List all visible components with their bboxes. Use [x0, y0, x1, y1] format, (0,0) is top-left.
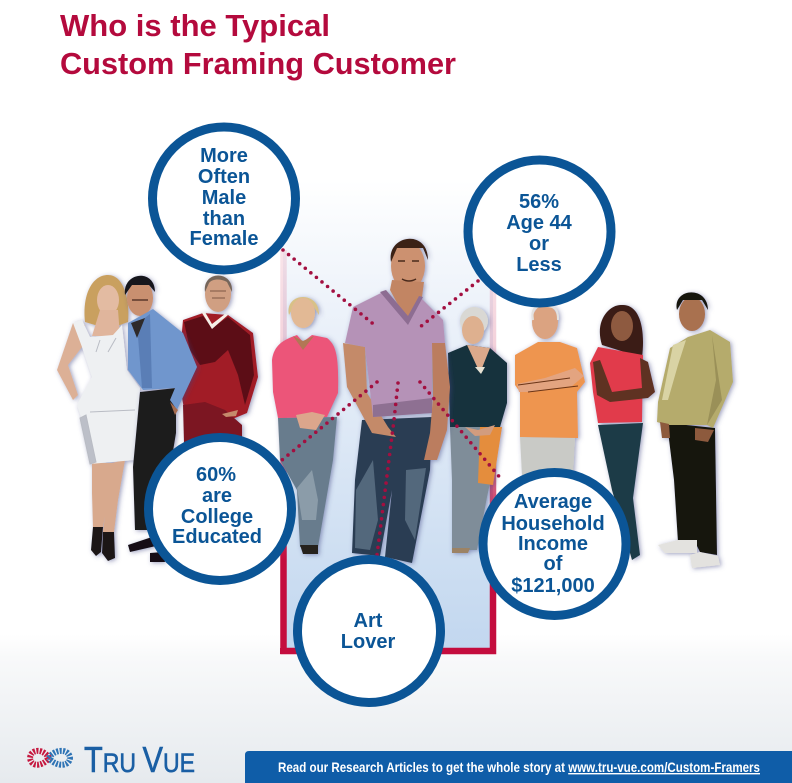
callout: 56% age 44 or less: Less	[516, 254, 562, 276]
person: central man in lilac t-shirt	[343, 239, 450, 563]
callout: 60% college educated: Educated	[172, 526, 262, 548]
callout: average household income: Household	[501, 513, 605, 535]
callout: more often male than female: Male	[202, 187, 246, 209]
callout: average household income: Average	[514, 491, 592, 513]
framed panel behind central figure	[280, 180, 496, 654]
title	[60, 9, 456, 81]
callout: average household income: $121,000	[511, 575, 595, 597]
callout: more often male than female: Often	[198, 166, 250, 188]
person: older woman in dark top	[448, 307, 507, 553]
callout: average household income: of	[544, 553, 563, 575]
person: woman in red top	[590, 305, 655, 560]
callout: 56% age 44 or less: Age 44	[506, 212, 573, 234]
person: older man in orange polo	[515, 305, 585, 475]
callout: art lover: Lover	[341, 631, 395, 653]
callout: 60% college educated: 60%	[196, 464, 236, 486]
person: young man in khaki sweater	[657, 292, 733, 568]
person: woman in pink sweater	[272, 297, 338, 554]
callout: 60% college educated: are	[202, 485, 232, 507]
callout: more often male than female	[152, 127, 296, 270]
callout: more often male than female: than	[203, 208, 245, 230]
callout: 60% college educated	[148, 438, 292, 580]
wordmark: TRU VUE	[84, 739, 195, 780]
callout: average household income: Income	[518, 533, 588, 555]
callout: 56% age 44 or less: 56%	[519, 191, 559, 213]
callout: 60% college educated: College	[181, 506, 253, 528]
callout: art lover	[298, 560, 440, 702]
callout: art lover: Art	[354, 610, 383, 632]
logo: Tru Vue	[30, 739, 195, 780]
dotted connector lines	[282, 250, 502, 555]
people group	[57, 239, 733, 568]
title: Custom Framing Customer	[60, 47, 456, 81]
person: man in red sweater	[178, 276, 258, 500]
title: Who is the Typical	[60, 9, 330, 43]
icon: infinity mark	[30, 751, 70, 765]
person: man in blue shirt	[125, 276, 197, 562]
footer banner	[245, 751, 792, 783]
callout: more often male than female: More	[200, 145, 248, 167]
callout: average household income	[483, 472, 626, 616]
footer banner: Read our Research Articles to get the whole story at www.tru-vue.com/Custom-Framers	[278, 759, 760, 775]
callout: 56% age 44 or less: or	[529, 233, 549, 255]
callout: 56% age 44 or less	[468, 160, 611, 303]
person: woman in white dress	[57, 275, 140, 561]
callout: more often male than female: Female	[190, 228, 258, 250]
